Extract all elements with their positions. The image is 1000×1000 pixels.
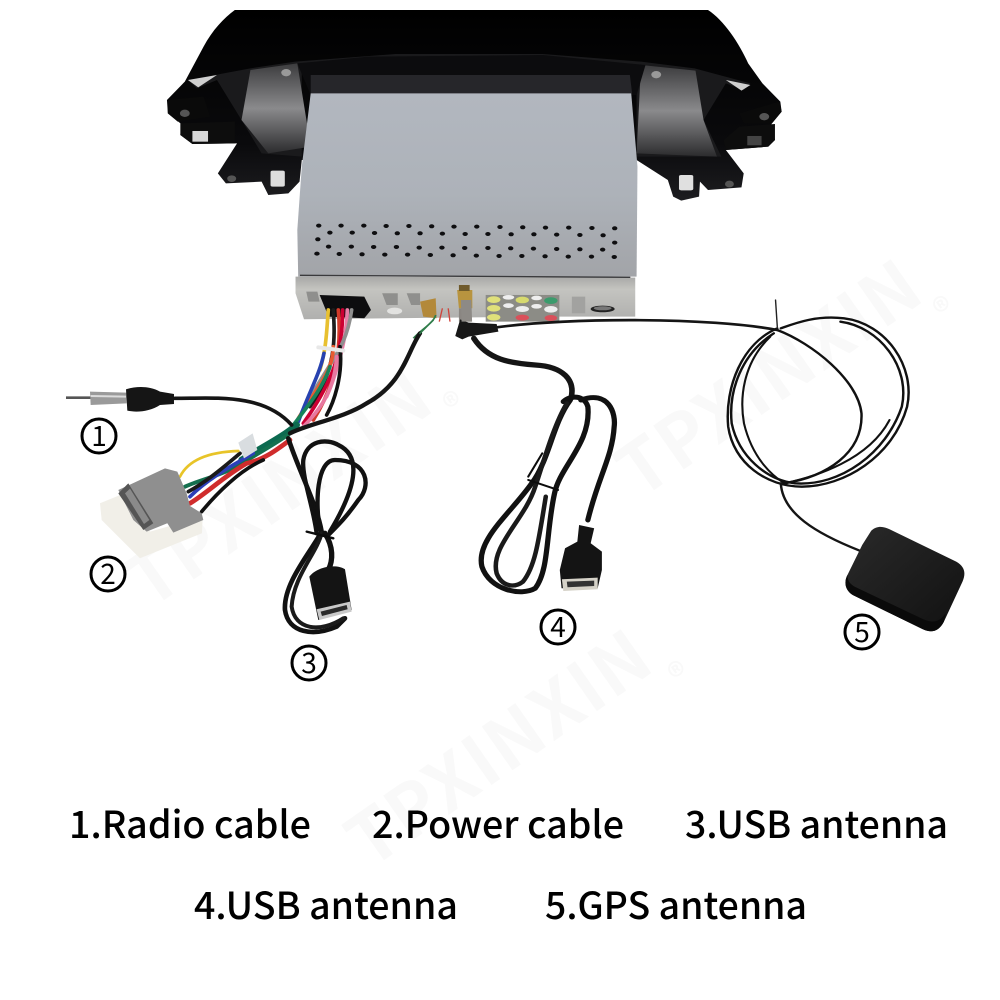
legend: 2.Power cable [372, 794, 624, 849]
cable: power harness wires [180, 310, 352, 512]
text: 5 [854, 611, 870, 651]
ventilation holes [314, 224, 617, 259]
text: 3 [301, 642, 317, 682]
radio plug connector [66, 387, 174, 412]
left cables [175, 310, 433, 632]
GPS coil [777, 330, 862, 483]
cable: USB 3 lead [290, 333, 420, 433]
USB 4 plug [560, 525, 602, 591]
metal top plate [297, 93, 637, 277]
watermarks: TPXINXIN [322, 600, 669, 887]
gold antenna connectors [420, 298, 437, 318]
USB 3 coil [285, 438, 345, 632]
text: 2 [100, 553, 116, 593]
rear connector panel [296, 275, 635, 338]
USB 3 plug [309, 566, 352, 620]
cable: radio antenna lead [175, 398, 292, 425]
cable: USB 4 lead [474, 338, 572, 398]
legend [69, 794, 948, 930]
watermarks: ® [658, 648, 700, 698]
legend: 3.USB antenna [685, 794, 948, 849]
3.5mm plug [455, 300, 498, 339]
USB 4 coil [481, 397, 588, 592]
watermarks: TPXINXIN [592, 230, 939, 517]
power connector [100, 433, 257, 558]
mounting tabs [168, 97, 782, 150]
number badges [82, 419, 879, 680]
watermarks: TPXINXIN [102, 340, 449, 627]
GPS antenna [845, 527, 964, 631]
legend: 1.Radio cable [69, 794, 311, 849]
bezel underside [188, 54, 750, 157]
right cables [474, 300, 909, 592]
head unit [167, 10, 782, 338]
watermarks: ® [923, 283, 965, 333]
bezel: black fascia [167, 10, 782, 201]
legend: 4.USB antenna [194, 875, 458, 930]
watermarks: ® [433, 378, 475, 428]
cable: GPS lead [497, 320, 777, 330]
watermarks [102, 230, 965, 887]
wire plug [320, 295, 371, 318]
text: 4 [550, 606, 566, 646]
AV sockets [486, 295, 559, 322]
text: 1 [91, 415, 107, 455]
legend: 5.GPS antenna [545, 875, 807, 930]
